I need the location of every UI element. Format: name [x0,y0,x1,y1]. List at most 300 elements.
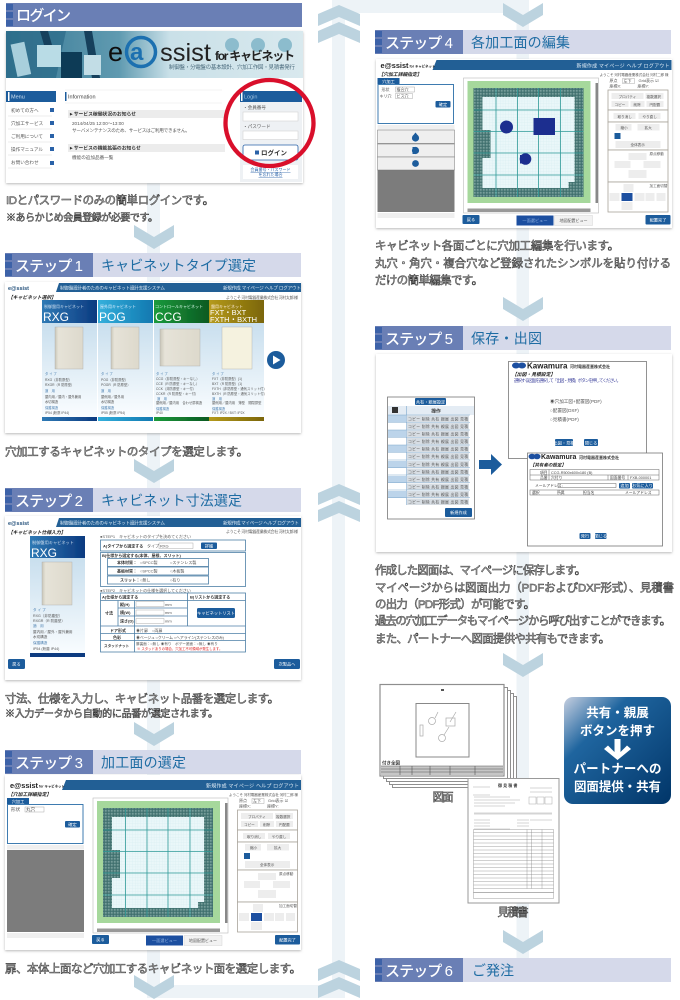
heading: step 3: 加工面の選定 [101,754,186,770]
right tool panel: コピー [244,822,255,827]
label: estimate: 見積書 [498,905,528,919]
estimate dialog: お気に入り [632,482,653,489]
form: type and material: RXG [160,544,169,548]
cabinet card FXT: 屋側用／屋内用 薄型 開閉扉型 [212,400,262,405]
panel: step 2 dimension form: 制御盤設計者のためのキャビネット設計支援システム [60,520,165,526]
cabinet card CCG: 適 用 [157,396,167,401]
stacked drawing sheets [380,684,516,788]
right tool panel: 座標Y: [267,802,279,808]
form: size table: 横(W) [120,609,131,615]
down arrow after step 3 [134,975,174,999]
callout: share button: パートナーへの [574,762,662,776]
callout: share button: ボタンを押す [580,723,655,738]
drawing grid with placed holes [464,78,598,213]
login form: ・パスワード [243,124,271,129]
form: type and material: ○ステンレス製 [170,559,196,565]
left tool panel: 丸穴 [26,806,36,813]
up chevrons: top [318,5,360,43]
down arrow to step 5 [503,297,543,321]
cabinet card FXT: FXTH（非防塵型・通気スリット付） [212,386,267,391]
estimate dialog: メールアドレス: [535,483,563,488]
cabinet card CCG: CCG [155,310,182,324]
panel: step 2 dimension form: ようこそ 河村電器産業株式会社 河村太郎 様 [226,528,298,534]
login form [240,91,302,182]
panel: step 4 CAD editor: 【穴加工詳細指定】 [378,71,422,78]
panel: step 3 CAD screen: 新規作成 マイページ ヘルプ ログアウト [206,782,299,790]
cabinet card FXT: BXT（R 防塵型）(1) [212,381,242,386]
estimate dialog: 穴付り [551,475,562,480]
form: size table: 色彩 [113,634,121,640]
panel: step 2 dimension form: e@ssist [8,521,29,527]
form: size table: B)リストから選定する [190,594,230,600]
estimate dialog: 【共有者の設定】 [530,462,566,468]
panel: step 1 cabinet types: 制御盤設計者のためのキャビネット設計支援システム [60,284,165,292]
right tool panel: 削除 [634,102,641,107]
panel: step 3 CAD screen: 【穴加工詳細指定】 [8,791,51,798]
heading: step 6 [375,958,671,982]
right tool panel: コピー [614,102,626,107]
cabinet card FXT: BXTH（R 防塵型・通気スリット付） [212,391,267,396]
text: step 4 note: キャビネット各面ごとに穴加工編集を行います。 [375,238,619,252]
heading: step 5: ステップ 5 [385,331,453,348]
output dialog: ○配置図(DXF) [550,408,579,414]
cabinet card CCG: CCKR（R 防塵型・キー付） [156,391,198,396]
left tool panel [7,798,84,938]
form: size table: ※ スタッドありの場合、穴加工不可領域が発生します。 [137,646,222,651]
cabinet card CCG: コントロールキャビネット [155,303,203,309]
left tool panel: 確定 [68,821,77,828]
panel: step 1 cabinet types: e@ssist [8,286,29,292]
cabinet card FXT: 適 用 [212,396,222,401]
form: size table: ●STEP2 キャビネットの仕様を選択してください [100,587,191,593]
left symbol list: ビス穴 [396,92,408,98]
cabinet card RXG: RXG [43,310,69,324]
estimate dialog: 河村電器産業株式会社 [579,454,619,460]
selected cabinet card: 保護構造 [33,640,48,645]
panel: step 1 cabinet types [5,282,301,433]
form: size table: 縦(H) [120,601,130,607]
down arrow to documents [503,653,543,677]
output dialog: 出図・見積 [554,440,575,446]
selected cabinet card: RXG [31,546,57,560]
right tool panel: プロパティ [248,814,266,819]
bottom buttons: 配置完了 [279,936,296,944]
cabinet card FXT: FXT: IP2X / BXT: IP2X [212,411,245,415]
panel: step 3 CAD screen [5,775,301,950]
cabinet card FXT: FXT（非防塵型）(1) [212,376,242,381]
saved drawing list: コピー 削除 共有 親展 出図 見積 [408,424,468,429]
estimate dialog: 追加 [620,482,629,489]
callout: share button: 図面提供・共有 [574,779,661,794]
cabinet card CCG: CCE（R 防塵型・キーなし） [156,381,199,386]
estimate dialog: 閉じる [594,534,607,540]
information column: Information [68,94,96,100]
saved drawing list: コピー 削除 共有 親展 出図 見積 [408,462,468,467]
output dialog: 【出図・見積設定】 [512,371,555,378]
panel: step 2 dimension form [5,516,301,680]
information column: サーバメンテナンスのため、サービスはご利用できません。 [72,127,190,134]
cabinet card RXG: 屋内用／屋内・屋外兼用 [45,394,81,399]
cabinet card FXT [209,300,267,421]
form: type and material: ○SPCC製 [140,568,158,574]
form: size table: 次製品へ [279,660,295,668]
cabinet card RXG: 適 用 [45,388,55,393]
bottom buttons: 配置完了 [650,216,666,224]
text: step 4 note: だけの簡単編集です。 [375,273,483,287]
cabinet card POG: 屋側用／屋外用 [101,394,124,399]
right tool panel: 加工面切替 [279,903,297,908]
right tool panel: Grid表示 ☑ [268,797,289,803]
login form: を忘れた場合 [258,171,282,177]
heading: step 5 [375,326,671,350]
bottom buttons: 戻る [467,217,475,223]
estimate dialog: 担当名 [583,490,595,495]
form: type and material: ●STEP1 キャビネットのタイプを決めてください [100,533,191,539]
information column: 2014/04/25 12:00～13:00 [72,121,124,126]
heading: step 1: ステップ 1 [15,258,83,275]
heading: step 2 [5,488,301,512]
form: type and material: タイプ: [147,542,160,548]
login form: ログイン [261,148,288,157]
heading: step 5: 保存・出図 [471,330,542,346]
right tool panel: 原点 [239,797,247,803]
heading: step 1: キャビネットタイプ選定 [101,258,256,274]
panel: step 4 CAD editor: 新規作成 マイページ ヘルプ ログアウト [576,62,670,70]
login form: ・会員番号 [243,104,266,111]
left symbol list: 確定 [439,101,447,108]
selected cabinet card: タ イ プ [33,607,46,612]
right tool panel: Grid表示 ☑ [638,77,659,83]
cabinet card RXG: タ イ プ [45,371,57,376]
cabinet card CCG: IP40 [156,411,163,415]
form: type and material: 詳細 [205,542,213,550]
cabinet card RXG: 水切構造 [45,399,59,404]
cabinet card POG [98,300,153,421]
down arrow after login [134,225,174,249]
panel: step 1 cabinet types: 新規作成 マイページ ヘルプ ログアウト [223,284,301,292]
text: step 5 note [375,563,674,646]
estimate dialog: Kawamura [541,454,577,461]
cabinet card RXG: RXGR（R 防塵型） [45,382,74,387]
cabinet card POG: 屋外用キャビネット [100,303,136,309]
banner: a [130,39,144,66]
text: step 4 note: 丸穴・角穴・複合穴など登録されたシンボルを貼り付ける [375,256,671,270]
saved drawing list: コピー 削除 共有 親展 出図 見積 [408,477,468,482]
form: type and material: ○有り [170,576,180,582]
right tool panel: 取り消し [247,834,262,839]
right tool panel: 全体表示 [260,862,275,867]
saved drawing list: コピー 削除 共有 親展 出図 見積 [408,500,468,504]
text: login note [6,193,214,224]
menu column: Menu [11,94,25,100]
estimate dialog: メールアドレス [625,490,652,495]
cabinet card RXG: IP54 (粉塵 IP44) [45,410,69,415]
form: size table: 寸法 [105,610,113,616]
cabinet card FXT: FXT・BXT [210,308,247,317]
saved drawing list: 共有・親展設定 [416,398,445,406]
label: drawing: 図面 [432,791,454,804]
banner: 制御盤・分電盤の基本設計、穴加工作図・見積書発行 [169,63,295,71]
form: type and material: ○無し [140,576,150,582]
text: step 3 note: 扉、本体上面など穴加工するキャビネット面を選定します。 [5,962,301,976]
panel: step 3 CAD screen: e@ssist [10,781,38,790]
right tool panel: プロパティ [618,94,636,99]
output dialog: Kawamura [527,362,568,370]
form: size table: 扉裏面：○無し ◉有り ボデー底面：○無し ◉有り [136,641,218,646]
right tool panel: 加工面切替 [650,183,668,188]
heading: step 2: キャビネット寸法選定 [101,492,242,508]
information column: ▸ サービス稼働状況のお知らせ [69,110,136,118]
left tool panel: 穴加工 [12,798,24,805]
heading: step 3 [5,750,301,774]
cabinet card POG: POG [99,310,126,324]
right tool panel: 左下 [253,798,261,804]
panel: step 4 CAD editor: for キャビネット [410,64,435,68]
cabinet card RXG: RXG（非防塵型） [45,377,72,382]
heading: step 4: 各加工面の編集 [471,34,570,50]
menu column [6,91,56,168]
text: step 5 note: 作成した図面は、マイページに保存します。 [375,563,586,577]
right tool panel [608,77,668,212]
selected cabinet card: 水切構造 [33,634,48,639]
text: step 2 note: ※入力データから自動的に品番が選定されます。 [5,707,218,720]
heading: step 4: ステップ 4 [385,35,453,52]
right tool panel: 全体表示 [630,142,645,147]
saved drawing list: コピー 削除 共有 親展 出図 見積 [408,446,468,452]
form: size table: スタッドナット [104,643,130,648]
cabinet card RXG [42,300,97,421]
bottom buttons: 戻る [96,937,105,943]
cabinet card POG: 水切構造 [101,399,115,404]
form: size table: 戻る [12,662,21,668]
right tool panel: 縮小 [620,125,628,130]
saved drawing list: コピー 削除 共有 親展 出図 見積 [408,439,468,444]
cabinet card CCG: 屋側用／屋内用 合わせ扉構造 [156,400,203,405]
saved drawing list: 操作 [431,408,441,414]
panel: step 2 dimension form: 【キャビネット仕様入力】 [8,529,66,536]
estimate dialog: 項目 [540,470,548,475]
selected cabinet card: 屋内用／屋外・屋外兼用 [33,629,73,634]
information column: 機能の追加品番一覧 [72,154,114,161]
left symbol list: 穴加工 [382,78,395,85]
saved drawing list: コピー 削除 共有 親展 出図 見積 [408,470,468,474]
login form: 会員番号・パスワード [250,166,290,172]
down arrow to step 4 [503,3,543,27]
heading: step 3: ステップ 3 [15,755,83,772]
bottom buttons: 一面選ビュー [522,217,548,224]
panel: step 2 dimension form: 新規作成 マイページ ヘルプ ログアウト [223,520,299,526]
form: type and material: A)タイプから選定する [103,542,143,548]
form: size table: ドア形式 [110,627,126,633]
callout: share button [564,697,671,804]
form: size table [8,587,300,669]
nav bar [5,283,301,292]
cabinet card POG: 保護構造 [101,405,115,410]
output dialog: 河村電器産業株式会社 [570,363,610,369]
bottom buttons [462,215,670,226]
output dialog: 選択する図面を選択して「出図・見積」ボタンを押してください。 [514,377,621,384]
cabinet card POG: タ イ プ [101,371,113,376]
form: type and material: ○木板製 [170,568,184,574]
drawing grid [93,798,228,933]
red circle highlight [226,80,314,166]
bottom buttons: 地図配置ビュー [560,217,588,223]
bottom buttons: 地図配置ビュー [189,937,217,943]
right tool panel: 拡大 [274,845,282,850]
output dialog: ◉穴加工図+配置図(PDF) [550,398,602,405]
right tool panel: 複数選択 [646,94,661,99]
right tool panel: 原点 [610,77,618,83]
panel: step 3 CAD screen: for キャビネット [39,784,65,788]
panel: step 1 cabinet types: ようこそ 河村電器産業株式会社 河村太郎 様 [226,294,298,300]
panel: step 1 cabinet types: 【キャビネット選択】 [8,294,56,301]
left symbol list: 複合穴 [396,86,408,92]
heading: step 1 [5,253,301,277]
down arrow to step 6 [503,930,543,954]
selected cabinet card: 適 用 [33,623,44,628]
right tool panel: 削除 [263,822,271,827]
text: step 5 note: また、パートナーへ図面提供や共有もできます。 [375,632,610,646]
down arrow after step 1 [134,459,174,483]
cabinet card FXT: 盤用キャビネット [211,303,243,309]
heading: step 2: ステップ 2 [15,493,83,510]
heading: step 4 [375,30,671,54]
arrow [479,454,502,475]
estimate sheet: 御 見 積 書 [498,782,517,788]
selected cabinet card: IP54 (粉塵 IP44) [33,646,59,651]
banner: for キャビネット [215,48,295,63]
login form: Login [244,94,257,100]
estimate dialog: CCG-R500x600x180 (B) [551,471,593,475]
selected cabinet card: RXG（非防塵型） [33,613,62,618]
selected cabinet card [30,536,85,657]
cabinet card FXT: FXTH・BXTH [210,315,257,324]
form: type and material [100,533,246,586]
text: login note: IDとパスワードのみの簡単ログインです。 [6,193,214,207]
cabinet card RXG: 制御盤用キャビネット [44,303,84,309]
saved drawing list: コピー 削除 共有 親展 出図 見積 [408,492,468,497]
banner [6,31,303,78]
cabinet card FXT: 保護構造 [212,406,226,411]
cabinet card CCG: タ イ プ [156,371,168,376]
form: size table: 深さ(D) [120,618,134,624]
heading: login: ログイン [16,8,71,24]
output dialog [508,362,646,458]
menu column: ご利用について [11,133,43,140]
form: size table: mm [165,602,172,607]
down arrow after step 2 [134,722,174,746]
form: size table: ◉ベージュ ○クリーム ○ヘアライン(ステンレスのみ) [136,634,225,640]
cabinet card POG: POGR（R 防塵型） [101,382,130,387]
right tool panel: やり直し [642,114,657,119]
form: size table: ◉片扉 ○両扉 [136,627,162,633]
form: size table: mm [165,618,172,624]
information column: ▸ サービスの機能拡張のお知らせ [69,144,141,152]
right tool panel: 円配置 [650,102,661,107]
heading: login [6,3,302,27]
saved drawing list: コピー 削除 共有 親展 出図 見積 [408,416,468,422]
form: type and material: 本体材質： [117,559,137,565]
menu column: 初めての方へ [11,107,39,114]
cabinet card CCG: CCK（非防塵型・キー付） [156,386,196,391]
panel: login screen [6,31,314,183]
text: step 1 note: 穴加工するキャビネットのタイプを選定します。 [5,446,248,458]
icon: down arrow [604,739,631,760]
left symbol list: 形状 [382,86,390,92]
estimate dialog [528,453,662,546]
estimate dialog: 選択 [532,490,540,495]
cabinet card POG: IP55 (粉塵 IP54) [101,410,125,415]
bottom buttons [92,935,300,946]
estimate dialog: FXB-000001 [630,476,651,480]
text: step 5 note: 過去の穴加工データもマイページから呼び出すことができます。 [375,614,671,628]
text: step 5 note: の出力（PDF形式）が可能です。 [375,597,535,611]
cabinet card CCG: CCG（非防塵型・キーなし） [156,376,200,381]
right tool panel: 取り消し [618,114,632,119]
saved drawing list [388,397,474,519]
left symbol list [378,78,454,218]
estimate sheet [468,778,559,903]
right tool panel: 円配置 [279,822,290,827]
information column [65,90,225,161]
menu column: 操作マニュアル [11,146,43,153]
cabinet card FXT: タ イ プ [212,371,224,376]
heading: step 6: ご発注 [472,962,514,978]
right tool panel: 座標X: [610,82,621,88]
saved drawing list: コピー 削除 共有 親展 出図 見積 [408,454,468,459]
form: type and material: スリット： [120,578,140,582]
cabinet card POG: POG（非防塵型） [101,377,128,382]
banner: e [108,37,123,67]
right tool panel: 原点移動 [279,871,294,876]
heading: step 6: ステップ 6 [385,963,453,980]
right tool panel: 拡大 [644,125,652,130]
icon: next button [267,351,285,369]
right tool panel: 原点移動 [650,151,664,156]
cabinet card RXG: 保護構造 [45,405,59,410]
panel: step 4 CAD editor [376,59,672,228]
estimate dialog: 発行 [581,533,589,540]
form: size table: A)仕様から選定する [102,594,138,600]
selected cabinet card: RXGR（R 防塵型） [33,618,65,623]
panel: step 4 CAD editor: ようこそ 河村電器産業株式会社 河村二郎 様 [600,72,669,77]
saved drawing list: コピー 削除 共有 親展 出図 見積 [408,432,468,436]
callout: share button: 共有・親展 [586,705,649,720]
selected cabinet card: 制御盤用キャビネット [32,539,74,546]
right tool panel: 縮小 [250,845,258,850]
stacked drawing sheets: 付き全図 [382,760,400,766]
up chevrons: bottom [318,960,360,998]
form: type and material: B)仕様から選定する(本体、屋根、スリット) [102,552,182,558]
panel: step 5 save and output [376,354,672,552]
panel: step 3 CAD screen: ようこそ 河村電器産業株式会社 河村二郎 様 [229,792,298,797]
text: step 5 note: マイページからは図面出力（PDFおよびDXF形式）、見積書 [375,580,674,594]
text: step 2 note [5,692,279,720]
banner: ssist [160,39,211,67]
right tool panel: 左下 [624,78,632,84]
right tool panel: 座標Y: [638,82,649,88]
text: login note: ※あらかじめ会員登録が必要です。 [6,211,158,224]
panel: step 4 CAD editor: e@ssist [380,61,409,70]
right tool panel [238,797,298,932]
menu column: 穴加工サービス [11,120,44,127]
form: type and material: 基板材質： [117,568,137,574]
cabinet card POG: 適 用 [101,388,111,393]
cabinet card CCG [154,300,209,421]
estimate dialog: 品番 [540,475,548,480]
estimate dialog: 所属 [557,490,565,495]
up chevrons: middle [318,484,360,522]
